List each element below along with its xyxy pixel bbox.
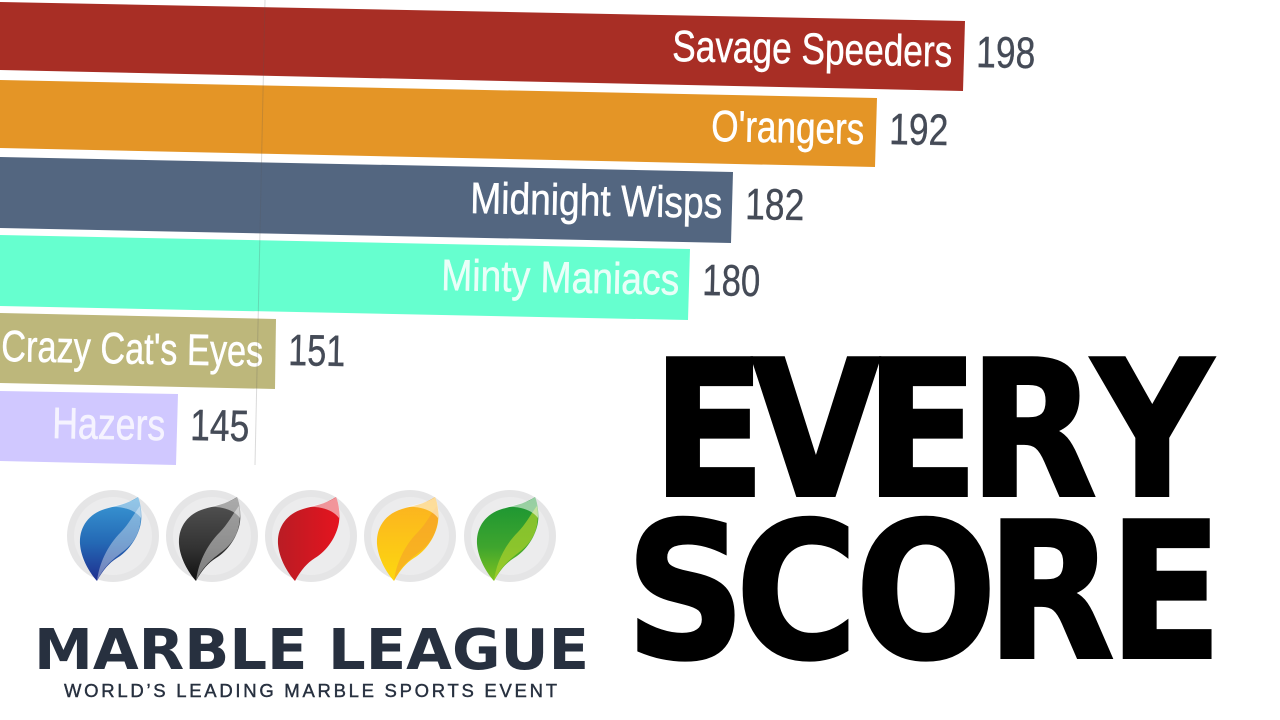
icon: green marble: [464, 490, 556, 582]
bar: Hazers: 145: [190, 401, 250, 451]
icon: black marble: [166, 490, 258, 582]
bar: O'rangers: 192: [889, 105, 949, 155]
bar: Midnight Wisps: [0, 157, 805, 243]
bar chart: [0, 0, 1036, 465]
bar: O'rangers: [0, 80, 949, 167]
icon: blue marble: [67, 490, 159, 582]
bar: Midnight Wisps: Midnight Wisps: [470, 174, 723, 228]
bar: Midnight Wisps: 182: [745, 180, 805, 230]
bar: Crazy Cat's Eyes: Crazy Cat's Eyes: [1, 322, 264, 376]
logo tagline: WORLD’S LEADING MARBLE SPORTS EVENT: [64, 680, 557, 701]
bar: Savage Speeders: Savage Speeders: [672, 22, 953, 77]
bar: Crazy Cat's Eyes: 151: [288, 326, 346, 376]
bar: Minty Maniacs: 180: [702, 256, 761, 306]
bar: Savage Speeders: [0, 2, 1036, 91]
icon: yellow marble: [364, 490, 456, 582]
title: every: EVERY: [652, 320, 1214, 540]
bar: Hazers: [0, 391, 250, 465]
bar: Minty Maniacs: [0, 235, 761, 320]
icon: red marble: [265, 490, 357, 582]
bar: O'rangers: O'rangers: [711, 102, 865, 154]
logo wordmark: MARBLE LEAGUE: [34, 618, 589, 683]
title: score: SCORE: [626, 482, 1222, 702]
bar: Minty Maniacs: Minty Maniacs: [441, 251, 680, 305]
bar: Hazers: Hazers: [52, 399, 166, 450]
bar: Savage Speeders: 198: [976, 28, 1036, 78]
